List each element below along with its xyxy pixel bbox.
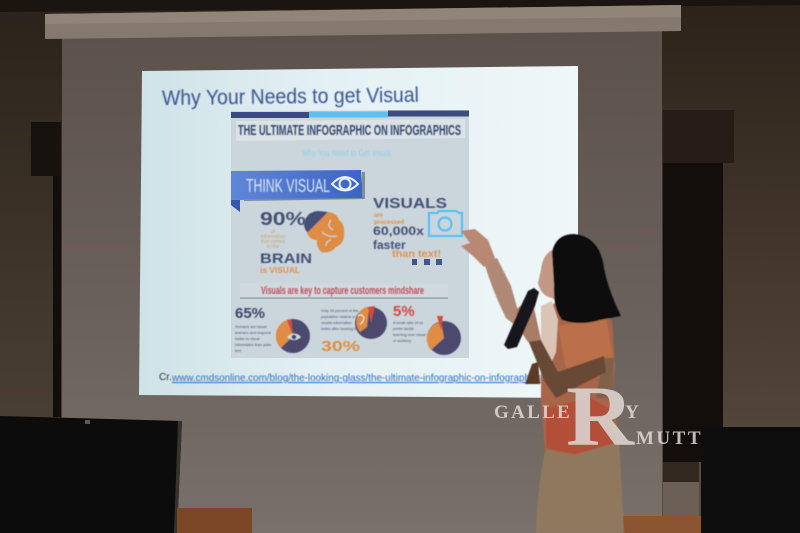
bench bottom left [177,508,252,533]
pie chart: 65 percent [276,319,310,353]
stat 65 percent: information than plain [235,343,271,347]
monitor bottom left [0,416,182,533]
90 percent stat: information [261,234,286,240]
stat 30 percent: better after hearing it. [321,327,357,331]
visuals stat [373,195,447,260]
visuals stat: are [374,213,384,219]
lower arm [528,340,606,398]
think visual ribbon: THINK VISUAL [246,175,330,196]
hair [552,234,621,323]
visuals stat: processed [374,220,404,226]
mindshare banner: Visuals are key to capture customers mindshare [261,285,424,297]
projector screen casing [45,5,681,533]
90 percent stat: that comes [261,239,286,245]
stat 30 percent: recalls information [321,321,352,325]
90 percent stat: to the [267,244,279,250]
icon: eye [332,177,358,190]
watermark: GALLE [494,402,572,423]
stat 30 percent: 30% [321,339,360,355]
microphone [504,288,539,349]
skirt [536,440,624,533]
top colour bar [231,110,469,118]
icon: camera [429,211,462,236]
raised arm [484,258,520,326]
bench bottom right [621,516,701,533]
stat 5 percent [393,303,461,355]
visuals stat: VISUALS [373,195,447,212]
hand on microphone [516,303,541,342]
visuals stat: 60,000x [373,224,424,238]
visuals stat: faster [373,238,406,252]
presenter [461,229,624,533]
think visual ribbon [231,170,365,212]
icon: text lines [412,259,442,265]
infographic heading: THE ULTIMATE INFOGRAPHIC ON INFOGRAPHICS [238,122,461,139]
stat 5 percent: A small ratio of us [393,321,423,325]
stat 30 percent [321,306,387,355]
stat 5 percent: prefer tactile [393,327,414,331]
floral lower blouse [546,398,618,454]
90 percent stat: 90% [260,208,306,229]
credit link: www.cmdsonline.com/blog/the-looking-glass/the-ultimate-infographic-on-infographics [171,372,542,384]
pie chart: 30 percent [355,306,387,339]
floral upper blouse [558,316,613,368]
blouse [541,303,620,455]
monitor bottom right [701,427,800,533]
stat 30 percent: population retains or [321,315,356,319]
subheading: Why You Need to Get Visual [302,148,391,159]
90 percent stat: BRAIN [260,250,312,266]
white ruffle collar [541,301,558,375]
stat 65 percent: learners and respond [235,331,271,335]
watermark: Y [625,402,639,423]
face and neck [538,250,566,304]
stat 65 percent: Humans are visual [235,325,267,329]
stat 30 percent: Only 30 percent of the [321,309,358,313]
icon: brain [304,211,344,252]
infographic panel [231,110,469,358]
90 percent stat: of [271,229,276,235]
infographic heading [236,119,465,141]
tan side of blouse [596,358,614,398]
watermark: MUTT [636,428,703,449]
credit link: Cr. [159,372,172,383]
mindshare banner [240,283,448,298]
pie chart: 5 percent [427,316,461,355]
left dark pelmet [31,122,61,417]
stat 5 percent: or auditory. [393,339,412,343]
dark ribbon behind arm [525,362,540,384]
stat 65 percent: text [235,349,242,353]
watermark: R [566,368,635,464]
visuals stat: than text! [392,249,441,260]
stat 65 percent [235,305,310,353]
stat 5 percent: learning over visual [393,333,426,337]
raised hand [461,229,495,267]
stat 65 percent: 65% [235,305,265,322]
stat 5 percent: 5% [393,303,415,320]
90 percent stat: is VISUAL [260,265,300,275]
stat 65 percent: better to visual [235,337,260,341]
slide title: Why Your Needs to get Visual [162,84,419,110]
projected slide [139,66,578,398]
90 percent stat [260,208,312,275]
right dark curtain [663,110,734,516]
watermark [494,368,703,464]
